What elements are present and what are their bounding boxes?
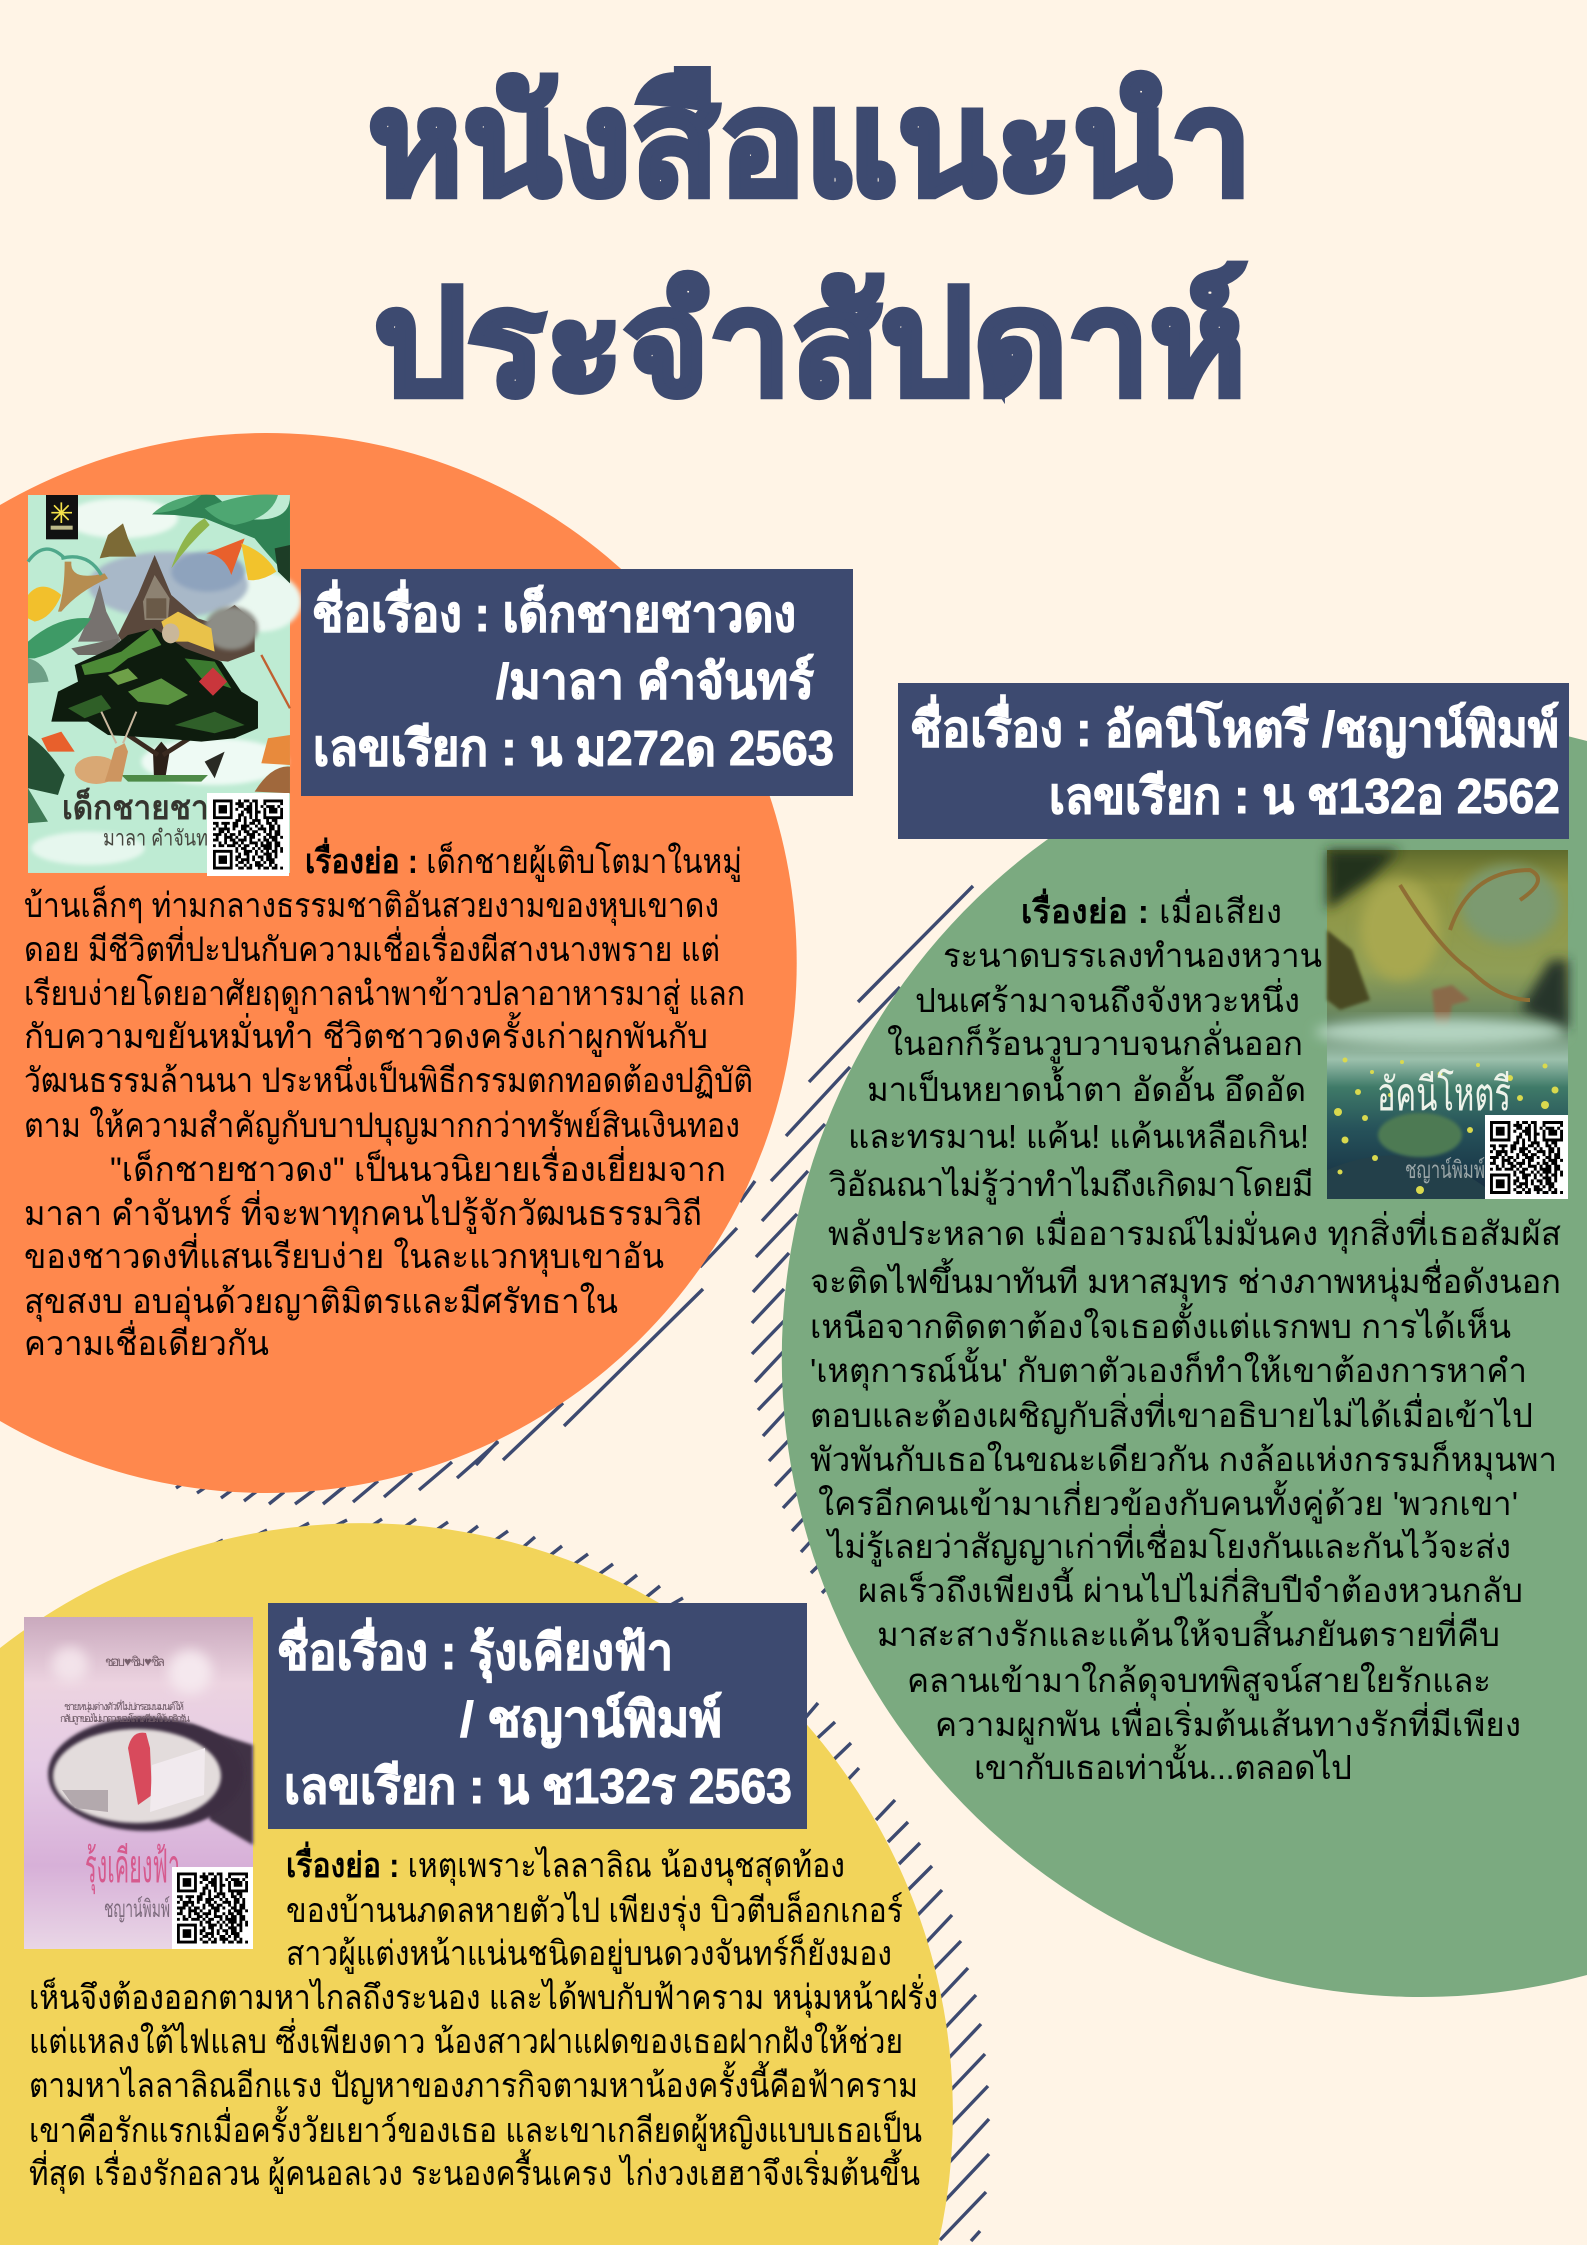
synopsis text: "เด็กชายชาวดง" เป็นนวนิยายเรื่องเยี่ยมจาก [110,1146,726,1189]
synopsis text: ไม่รู้เลยว่าสัญญาเก่าที่เชื่อมโยงกันและกันไว้จะส่ง [825,1524,1511,1567]
synopsis text: และทรมาน! แค้น! แค้นเหลือเกิน! [848,1118,1309,1155]
synopsis text: มาสะสางรักและแค้นให้จบสิ้นภยันตรายที่คืบ [877,1611,1500,1653]
heading box [898,683,1569,839]
synopsis text: เหนือจากติดตาต้องใจเธอตั้งแต่แรกพบ การได้เห็น [810,1303,1511,1345]
synopsis text [24,837,753,1363]
synopsis text [29,1841,938,2194]
synopsis text: ผลเร็วถึงเพียงนี้ ผ่านไปไม่กี่สิบปีจำต้องหวนกลับ [858,1567,1523,1609]
synopsis text: แต่แหลงใต้ไฟแลบ ซึ่งเพียงดาว น้องสาวฝาแฝดของเธอฝากฝังให้ช่วย [29,2018,903,2061]
cover tree [51,612,258,782]
hatched background circle [176,886,989,2241]
heading box: เลขเรียก : น ม272ด 2563 [313,722,834,776]
synopsis text: ที่สุด เรื่องรักอลวน ผู้คนอลเวง ระนองครื้นเครง ไก่งวงเฮฮาจึงเริ่มต้นขึ้น [29,2149,920,2194]
synopsis text: 'เหตุการณ์นั้น' กับตาตัวเองก็ทำให้เขาต้องการหาคำ [810,1347,1527,1391]
cover deer [75,712,225,784]
synopsis text: ในอกก็ร้อนวูบวาบจนกลั่นออก [887,1021,1303,1064]
cover title: อัคนีโหตรี [1377,1068,1511,1120]
heading box: ชื่อเรื่อง : เด็กชายชาวดง [312,579,796,642]
heading box: /มาลา คำจันทร์ [496,654,814,709]
synopsis text: ความผูกพัน เพื่อเริ่มต้นเส้นทางรักที่มีเพียง [935,1702,1521,1745]
synopsis text: พัวพันกับเธอในขณะเดียวกัน กงล้อแห่งกรรมก็หมุนพา [810,1440,1557,1480]
book cover: รุ้งเคียงฟ้า: กลับถูกของไม่มาดวงของโลกเตรียมให้มาธิกรัน [60,1712,190,1725]
panel: เด็กชายชาวดง (orange) [0,433,853,1493]
synopsis text: ดอย มีชีวิตที่ปะปนกับความเชื่อเรื่องผีสางนางพราย แต่ [24,926,720,969]
synopsis text: ความเชื่อเดียวกัน [24,1320,269,1363]
heading box: ชื่อเรื่อง : อัคนีโหตรี /ชญาน์พิมพ์ [910,694,1559,758]
synopsis text: วัฒนธรรมล้านนา ประหนึ่งเป็นพิธีกรรมตกทอดต้องปฏิบัติ [24,1057,753,1100]
green circle [782,719,1587,1997]
panel: อัคนีโหตรี (green) [782,683,1587,1997]
book cover: รุ้งเคียงฟ้า: ชายหนุ่มต่างตัวที่ไม่ปกรอมนมนต์ให้ [64,1699,184,1713]
heading box: เลขเรียก : น ช132ร 2563 [284,1760,792,1814]
synopsis text: พลังประหลาด เมื่ออารมณ์ไม่มั่นคง ทุกสิ่งที่เธอสัมผัส [828,1211,1561,1254]
synopsis text: มาลา คำจันทร์ ที่จะพาทุกคนไปรู้จักวัฒนธรรมวิถี [24,1190,702,1234]
synopsis text: เรื่องย่อ : เมื่อเสียง [1021,888,1282,930]
title: ประจำสัปดาห์ [374,262,1246,425]
title [368,62,1252,425]
orange circle [0,433,797,1493]
book cover: รุ้งเคียงฟ้า: รุ้งเคียงฟ้า [85,1840,180,1895]
panel: รุ้งเคียงฟ้า (yellow) [0,1523,953,2245]
synopsis text: จะติดไฟขึ้นมาทันที มหาสมุทร ช่างภาพหนุ่มชื่อดังนอก [810,1258,1561,1302]
book cover: เด็กชายชาวดง [28,494,301,873]
cover title: เด็กชายชา [62,786,209,827]
cover author: ชญาน์พิมพ์ [104,1895,170,1923]
synopsis text: ตาม ให้ความสำคัญกับบาปบุญมากกว่าทรัพย์สินเงินทอง [24,1106,740,1146]
heading box: เลขเรียก : น ช132อ 2562 [1049,770,1560,824]
cover author: มาลา คำจันท [103,826,208,851]
cover tagline: ชอบ ♥ ชิม ♥ ชิล [105,1654,165,1669]
cover author: ชญาน์พิมพ์ [1405,1156,1485,1184]
QR code [1485,1115,1568,1199]
synopsis text: เรื่องย่อ : เด็กชายผู้เติบโตมาในหมู่ [305,837,742,882]
heading box: ชื่อเรื่อง : รุ้งเคียงฟ้า [277,1617,673,1683]
cover logo [46,495,78,539]
synopsis text: เรื่องย่อ : เหตุเพราะไลลาลิณ น้องนุชสุดท้อง [286,1841,845,1886]
cover firefly dots [1334,1058,1558,1194]
book cover: อัคนีโหตรี [1315,850,1568,1199]
heading box: / ชญาน์พิมพ์ [460,1692,722,1748]
synopsis text: สาวผู้แต่งหน้าแน่นชนิดอยู่บนดวงจันทร์ก็ยังมอง [286,1933,892,1974]
heading box [301,569,853,796]
QR code [207,793,289,876]
synopsis text: ระนาดบรรเลงทำนองหวาน [943,937,1322,974]
synopsis text: ของชาวดงที่แสนเรียบง่าย ในละแวกหุบเขาอัน [24,1233,664,1277]
synopsis text: เรียบง่ายโดยอาศัยฤดูกาลนำพาข้าวปลาอาหารมาสู่ แลก [24,974,745,1014]
heading box [268,1603,807,1829]
synopsis text: ตอบและต้องเผชิญกับสิ่งที่เขาอธิบายไม่ได้เมื่อเข้าไป [810,1393,1533,1434]
yellow circle [0,1523,953,2245]
cover temple [71,555,258,662]
synopsis text [810,888,1561,1786]
synopsis text: บ้านเล็กๆ ท่ามกลางธรรมชาติอันสวยงามของหุบเขาดง [24,885,719,926]
synopsis text: ปนเศร้ามาจนถึงจังหวะหนึ่ง [915,978,1300,1019]
QR code [172,1867,253,1949]
synopsis text: ใครอีกคนเข้ามาเกี่ยวข้องกับคนทั้งคู่ด้วย 'พวกเขา' [818,1480,1518,1524]
synopsis text: วิอัณณาไม่รู้ว่าทำไมถึงเกิดมาโดยมี [828,1166,1314,1205]
synopsis text: มาเป็นหยาดน้ำตา อัดอั้น อึดอัด [867,1066,1306,1108]
synopsis text: กับความขยันหมั่นทำ ชีวิตชาวดงครั้งเก่าผูกพันกับ [24,1012,708,1057]
title: หนังสือแนะนำ [368,62,1252,225]
synopsis text: เขากับเธอเท่านั้น...ตลอดไป [974,1744,1352,1786]
synopsis text: คลานเข้ามาใกล้ดุจบทพิสูจน์สายใยรักและ [907,1662,1491,1701]
synopsis text: สุขสงบ อบอุ่นด้วยญาติมิตรและมีศรัทธาใน [24,1282,618,1322]
synopsis text: เห็นจึงต้องออกตามหาไกลถึงระนอง และได้พบกับฟ้าคราม หนุ่มหน้าฝรั่ง [29,1974,938,2018]
synopsis text: ของบ้านนภดลหายตัวไป เพียงรุ่ง บิวตีบล็อกเกอร์ [286,1890,903,1931]
cover leaves [28,494,290,823]
synopsis text: เขาคือรักแรกเมื่อครั้งวัยเยาว์ของเธอ และเขาเกลียดผู้หญิงแบบเธอเป็น [29,2106,922,2151]
book cover: รุ้งเคียงฟ้า [24,1617,253,1949]
synopsis text: ตามหาไลลาลิณอีกแรง ปัญหาของภารกิจตามหาน้องครั้งนี้คือฟ้าคราม [29,2061,918,2105]
